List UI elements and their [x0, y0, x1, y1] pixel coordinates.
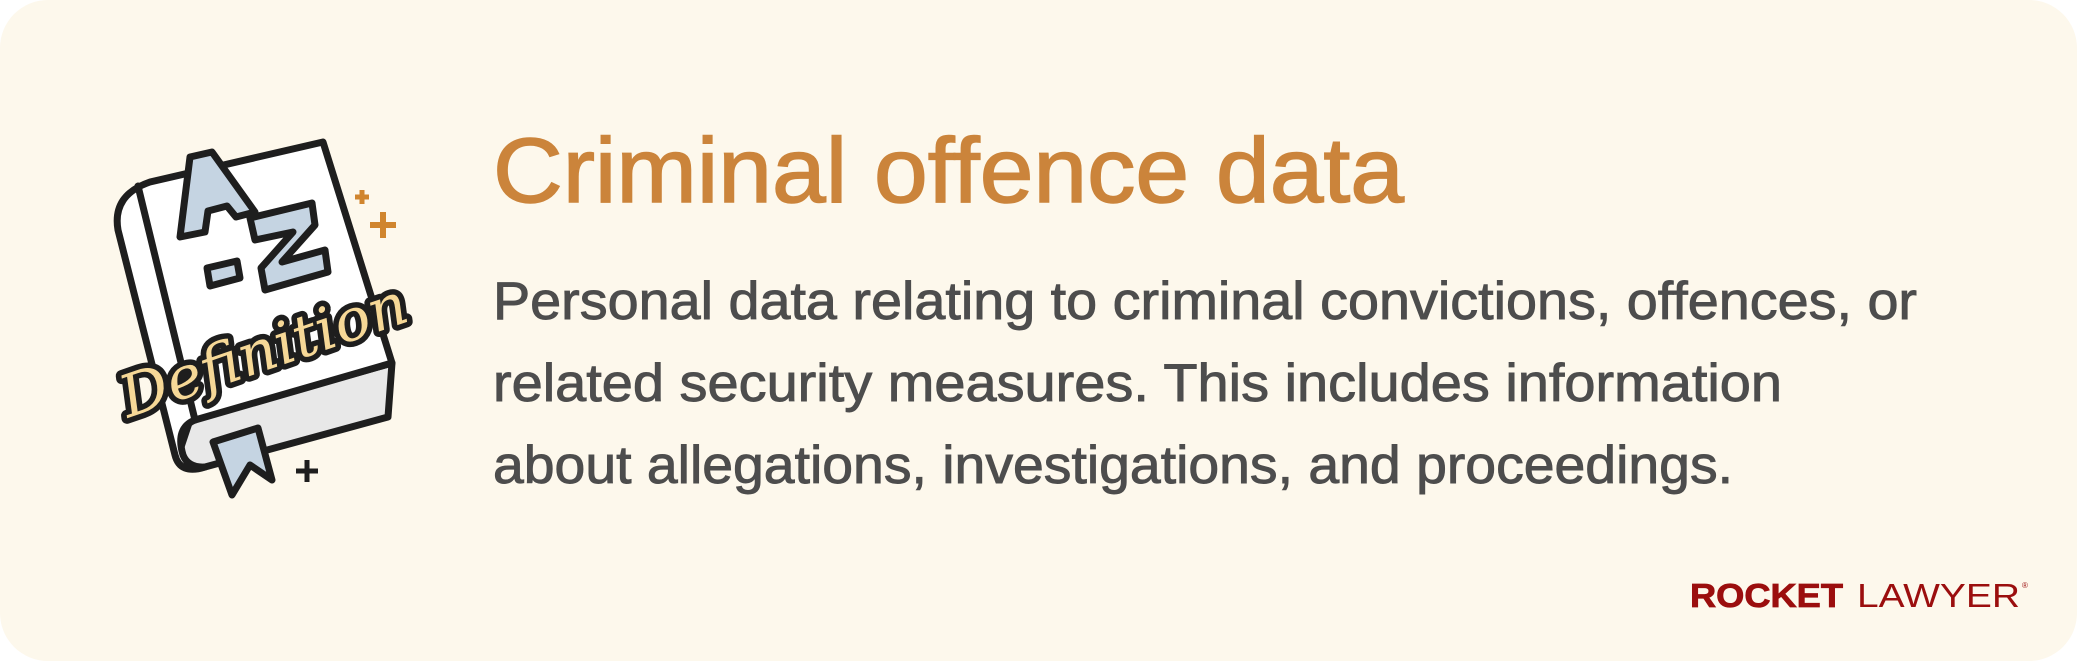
page block — [180, 363, 392, 468]
body text: related security measures. This includes information — [493, 354, 1782, 413]
logo: Rocket Lawyer: ROCKET — [1690, 577, 1843, 614]
dash — [207, 261, 240, 286]
body text: about allegations, investigations, and proceedings. — [493, 436, 1733, 495]
icon: Definition script: Definition — [109, 269, 416, 432]
logo: Rocket Lawyer: ® — [2022, 581, 2028, 590]
logo: Rocket Lawyer: LAWYER — [1857, 577, 2020, 614]
title: Criminal offence data — [493, 120, 1405, 222]
icon: A-Z definition book — [117, 142, 392, 495]
body text — [493, 272, 1917, 495]
letter Z — [250, 203, 328, 290]
cover — [117, 142, 392, 469]
body text: Personal data relating to criminal convictions, offences, or — [493, 272, 1917, 331]
icon: sparkles — [296, 190, 396, 482]
logo: Rocket Lawyer — [1690, 577, 2028, 614]
letter A — [180, 152, 255, 237]
bookmark — [213, 428, 272, 495]
